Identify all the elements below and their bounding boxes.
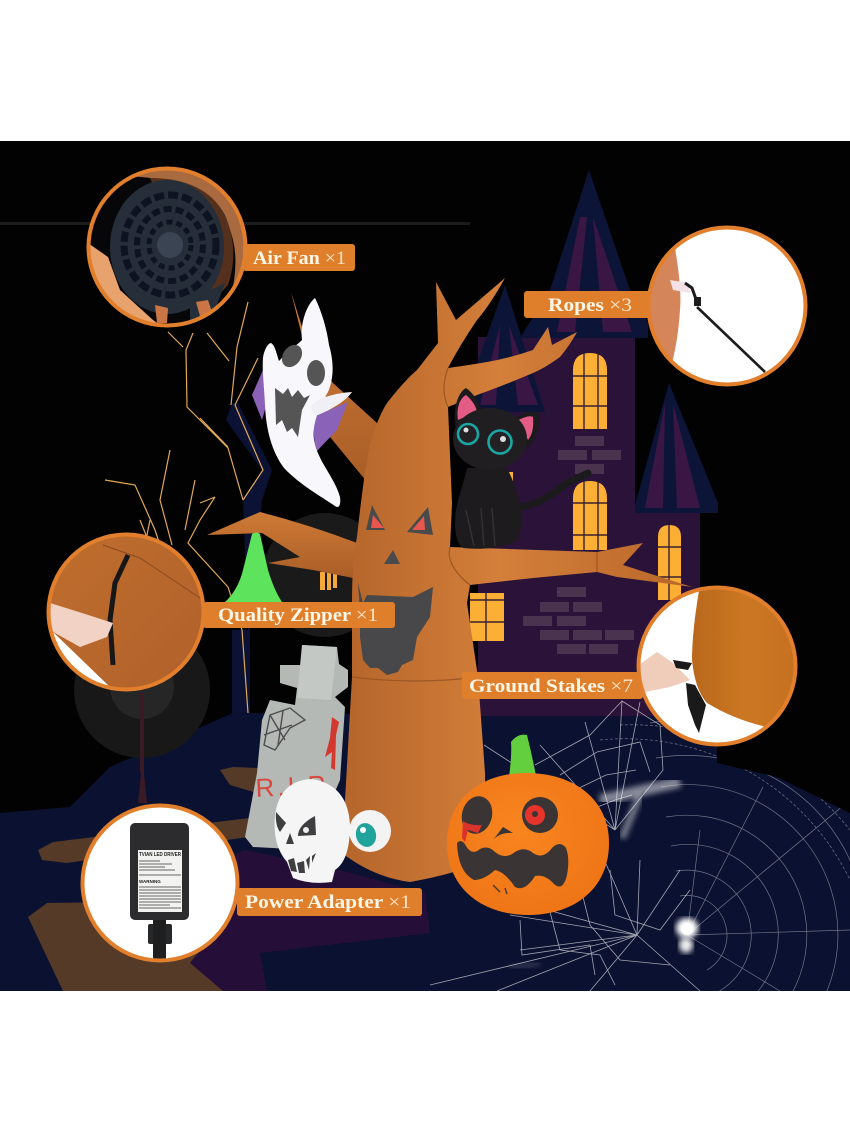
black cat	[453, 388, 588, 549]
tree mouth	[358, 583, 433, 675]
label: ropes	[524, 291, 654, 318]
window: middle	[573, 481, 607, 550]
lower-left branch	[207, 512, 357, 578]
power adapter photo	[84, 808, 236, 958]
upper-left branch	[291, 292, 377, 482]
central spire	[520, 170, 648, 338]
adapter label	[138, 850, 182, 912]
ghost	[252, 298, 352, 507]
faint horizon line	[0, 222, 470, 225]
window: upper	[573, 353, 607, 429]
air fan photo	[90, 170, 244, 323]
callout: ropes	[524, 225, 810, 390]
label: power adapter: Power Adapter ×1	[245, 892, 411, 913]
spider webs	[430, 700, 850, 991]
tree nose	[384, 550, 400, 564]
label: air fan	[243, 244, 355, 271]
label: power adapter	[237, 888, 422, 916]
skull	[274, 779, 350, 883]
label: ground stakes	[462, 672, 643, 699]
adapter label: WARNING	[139, 879, 161, 884]
adapter plug	[148, 924, 172, 944]
ground stakes photo	[640, 590, 794, 742]
bricks	[523, 436, 634, 654]
R.I.P text: R.I.P	[255, 769, 329, 803]
label: quality zipper	[203, 602, 395, 628]
black backdrop	[0, 141, 850, 991]
inflatable tree	[207, 278, 692, 882]
web spider	[676, 918, 698, 953]
adapter body	[130, 823, 189, 920]
callout: power adapter	[80, 805, 422, 965]
right spire	[635, 383, 718, 513]
label: ground stakes: Ground Stakes ×7	[469, 676, 633, 697]
infographic scene	[0, 141, 850, 991]
window: behind cat	[502, 472, 513, 495]
window: lower	[470, 593, 504, 641]
haunted house	[460, 170, 718, 716]
tombstone	[245, 645, 348, 850]
eyeball	[349, 810, 391, 852]
callout: air fan	[85, 165, 355, 330]
zipper photo	[50, 536, 202, 688]
label: ropes: Ropes ×3	[548, 295, 632, 316]
label: air fan: Air Fan ×1	[253, 248, 346, 269]
callout: quality zipper	[40, 530, 395, 700]
trunk	[342, 278, 692, 882]
witch hat	[225, 532, 282, 602]
tree eye right	[407, 507, 433, 535]
window: right	[658, 525, 681, 600]
left spire	[460, 285, 545, 412]
label: quality zipper: Quality Zipper ×1	[218, 605, 378, 626]
adapter label: TVIAN LED DRIVER	[139, 852, 181, 858]
graveyard ground	[0, 713, 850, 991]
pumpkin	[447, 735, 609, 915]
tree eye left	[366, 505, 385, 530]
background bare tree and moons	[74, 302, 387, 803]
callout: ground stakes	[462, 585, 800, 750]
ropes photo	[650, 230, 804, 382]
